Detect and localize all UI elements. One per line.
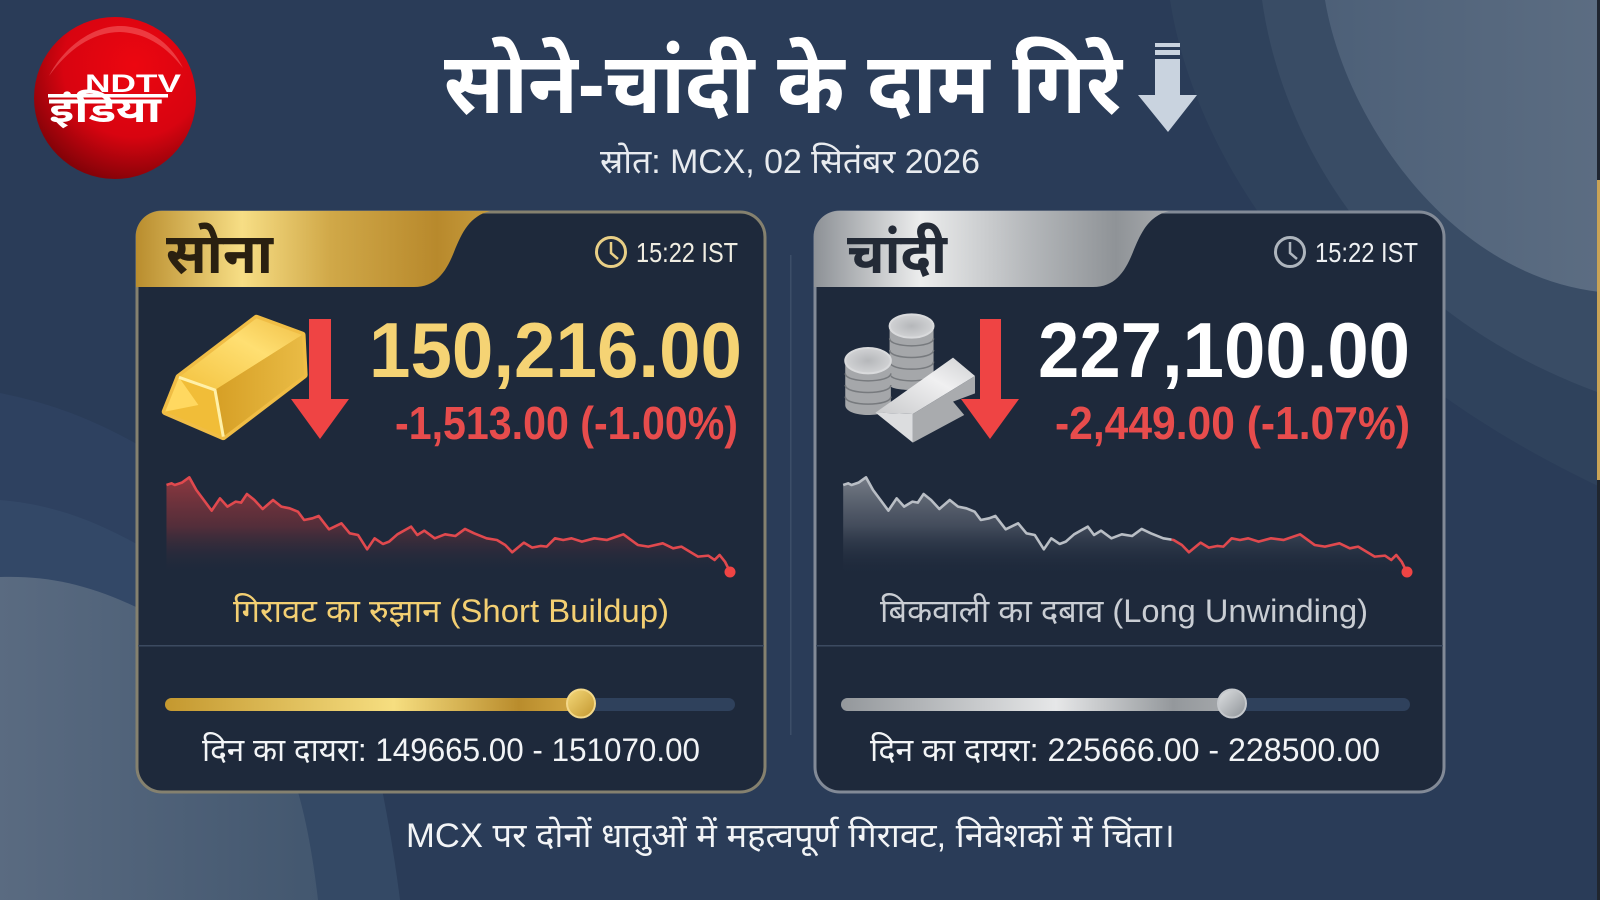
panel divider — [790, 255, 792, 735]
icon: clock — [596, 238, 626, 266]
source line: स्रोत: MCX, 02 सितंबर 2026 — [600, 143, 980, 181]
chart: gold intraday sparkline — [166, 477, 730, 575]
panel: silver — [814, 211, 1444, 792]
logo: NDTV India: इंडिया — [49, 89, 163, 130]
timestamp: 15:22 IST — [636, 237, 738, 268]
silver tab — [814, 211, 1169, 287]
adjacent image edge strip — [1597, 0, 1600, 900]
panel: gold — [136, 211, 765, 792]
silver change: -2,449.00 (-1.07%) — [1055, 397, 1410, 449]
gold trend label: गिरावट का रुझान (Short Buildup) — [233, 593, 669, 629]
icon: clock — [1276, 238, 1304, 266]
icon: red down arrow — [291, 319, 349, 439]
timestamp: 15:22 IST — [1315, 237, 1418, 268]
chart end dot — [1402, 566, 1412, 578]
logo: NDTV India: NDTV — [85, 70, 181, 98]
coin stack: back — [890, 314, 934, 390]
gold day range: दिन का दायरा: 149665.00 - 151070.00 — [202, 732, 700, 768]
logo: NDTV India — [34, 17, 196, 179]
chart: silver intraday sparkline — [843, 477, 1407, 575]
footer note: MCX पर दोनों धातुओं में महत्वपूर्ण गिरावट, निवेशकों में चिंता। — [406, 816, 1175, 856]
silver day range: दिन का दायरा: 225666.00 - 228500.00 — [870, 732, 1380, 768]
gold tab label: सोना — [166, 222, 275, 285]
silver trend label: बिकवाली का दबाव (Long Unwinding) — [880, 593, 1368, 629]
silver tab label: चांदी — [847, 222, 948, 285]
chart end dot — [724, 566, 736, 578]
gold tab — [136, 211, 490, 287]
silver price: 227,100.00 — [1038, 306, 1410, 394]
gold price: 150,216.00 — [369, 306, 742, 394]
silver range slider — [841, 690, 1410, 718]
coin stack: front — [845, 348, 891, 415]
gold range slider — [165, 690, 735, 718]
gold change: -1,513.00 (-1.00%) — [395, 397, 738, 449]
icon: silver coins and bar — [845, 314, 975, 443]
title: सोने-चांदी के दाम गिरे — [444, 36, 1123, 132]
icon: down arrow beside title — [1138, 43, 1197, 132]
icon: red down arrow — [961, 319, 1019, 439]
silver bar — [876, 358, 975, 443]
icon: gold bar — [165, 318, 304, 437]
